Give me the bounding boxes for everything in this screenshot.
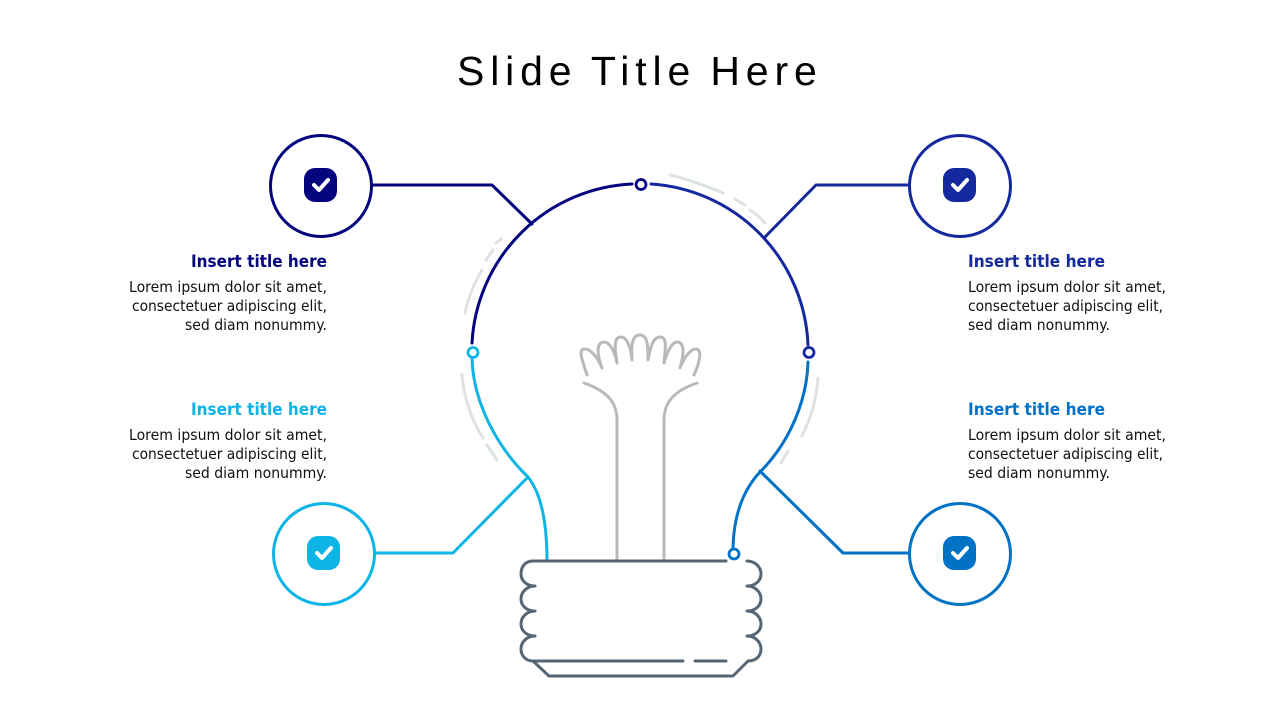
heading: Insert title here xyxy=(191,400,327,419)
callout: bottom left xyxy=(129,400,528,604)
connector xyxy=(372,185,532,224)
icon: check badge xyxy=(943,168,976,202)
bulb illustration xyxy=(462,175,818,676)
body text: consectetuer adipiscing elit, xyxy=(968,445,1163,463)
circle xyxy=(910,504,1010,604)
icon: check badge xyxy=(307,536,340,570)
bulb glass outline xyxy=(472,184,808,561)
circle xyxy=(270,136,372,236)
callout: top right xyxy=(764,136,1166,334)
circle xyxy=(274,504,374,604)
body text: consectetuer adipiscing elit, xyxy=(132,445,327,463)
body text: sed diam nonummy. xyxy=(968,316,1110,334)
callout: bottom right xyxy=(760,400,1166,604)
body text xyxy=(129,426,327,482)
body text: sed diam nonummy. xyxy=(185,316,327,334)
node: top xyxy=(636,180,646,190)
body text: consectetuer adipiscing elit, xyxy=(132,297,327,315)
body text: sed diam nonummy. xyxy=(968,464,1110,482)
node: left xyxy=(468,348,478,358)
bulb screw base xyxy=(521,561,761,676)
heading: Insert title here xyxy=(968,252,1105,271)
icon: check badge xyxy=(304,168,337,202)
body text xyxy=(129,278,327,334)
node: bottom right xyxy=(729,549,739,559)
body text: Lorem ipsum dolor sit amet, xyxy=(129,278,327,296)
connector xyxy=(764,185,908,238)
body text: consectetuer adipiscing elit, xyxy=(968,297,1163,315)
circle xyxy=(910,136,1010,236)
heading: Insert title here xyxy=(191,252,327,271)
title: Slide Title Here xyxy=(457,48,823,94)
body text: sed diam nonummy. xyxy=(185,464,327,482)
body text: Lorem ipsum dolor sit amet, xyxy=(968,278,1166,296)
body text: Lorem ipsum dolor sit amet, xyxy=(129,426,327,444)
body text xyxy=(968,278,1166,334)
connector xyxy=(760,471,909,553)
heading: Insert title here xyxy=(968,400,1105,419)
connector xyxy=(375,477,528,553)
filament xyxy=(581,335,700,560)
decorative light arcs xyxy=(462,175,818,463)
body text: Lorem ipsum dolor sit amet, xyxy=(968,426,1166,444)
node: right xyxy=(804,348,814,358)
callout: top left xyxy=(129,136,532,334)
icon: check badge xyxy=(943,536,976,570)
body text xyxy=(968,426,1166,482)
